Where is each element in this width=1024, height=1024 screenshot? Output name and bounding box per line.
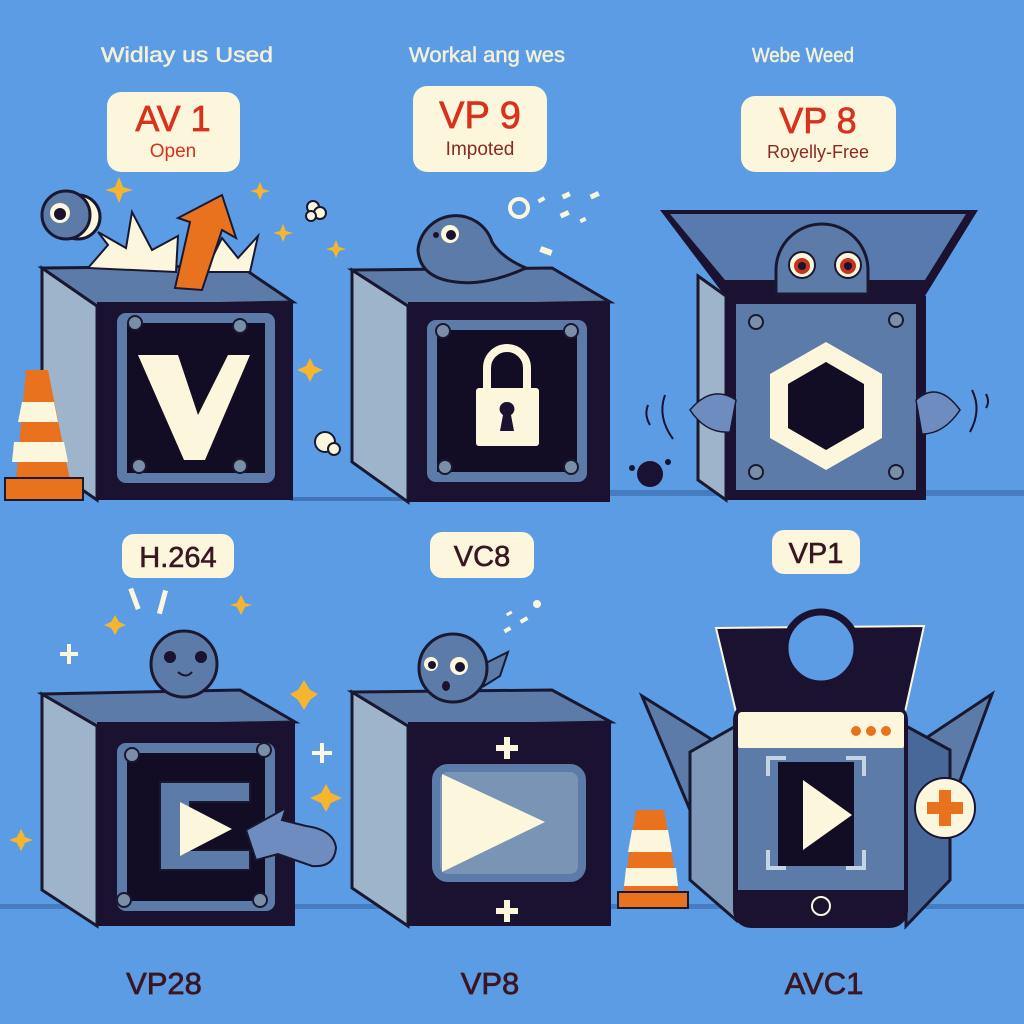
sparkles: [9, 177, 346, 851]
label: VP8: VP8: [461, 966, 519, 1001]
icon: dark gear debris: [629, 459, 671, 487]
traffic cone: left: [5, 370, 83, 500]
confetti: lower VP8: [503, 600, 541, 633]
ground lines: [0, 490, 1024, 909]
character: VP28 ball: [151, 631, 217, 697]
confetti: VP9: [537, 191, 600, 256]
heading: webe weed: Webe Weed: [752, 45, 854, 67]
label: AVC1: AVC1: [785, 966, 863, 1001]
heading: working: Workal ang wes: [409, 44, 565, 67]
character: VP9 bird: [418, 216, 526, 283]
box: VP8 with open flaps and hexagon: [660, 210, 978, 500]
badge: VC8: VC8: [454, 541, 510, 573]
box: AVC1 open with phone: [642, 612, 992, 928]
small puffs: [306, 199, 528, 455]
label: AV1 Open: Open: [150, 141, 196, 162]
box: VP28 with play: [42, 690, 336, 926]
badge: VP1: VP1: [789, 538, 843, 570]
label: VP9 Imported: [413, 86, 547, 172]
box: VP9 with lock: [352, 268, 610, 502]
badge: H.264: [122, 534, 234, 578]
icon: plus badge: [915, 778, 975, 838]
motion marks: VP8 hands: [646, 390, 988, 439]
label: VP8 Royalty-Free: [741, 96, 896, 172]
character: AV1 ball: [42, 191, 100, 239]
character: VP8 peeking: [690, 224, 960, 434]
plus marks: [60, 588, 332, 763]
box: VP8 lower with play panel: [352, 690, 611, 926]
label: VP9 Imported: VP 9: [439, 95, 521, 137]
character: lower VP8 ball: [419, 634, 508, 702]
badge: VC8: [430, 532, 534, 578]
box: AV1 with V logo: [42, 195, 293, 500]
label: AV1 Open: [107, 92, 240, 172]
label: VP8 Royalty-Free: Royelly-Free: [767, 142, 869, 162]
heading: widely used: Widlay us Used: [101, 44, 273, 67]
label: VP28: VP28: [126, 966, 202, 1001]
label: VP8 Royalty-Free: VP 8: [779, 100, 857, 141]
badge: VP1: [772, 530, 860, 574]
badge: H.264: H.264: [139, 542, 217, 574]
traffic cone: middle: [618, 810, 688, 908]
label: VP9 Imported: Impoted: [446, 139, 514, 160]
label: AV1 Open: AV 1: [135, 98, 211, 139]
